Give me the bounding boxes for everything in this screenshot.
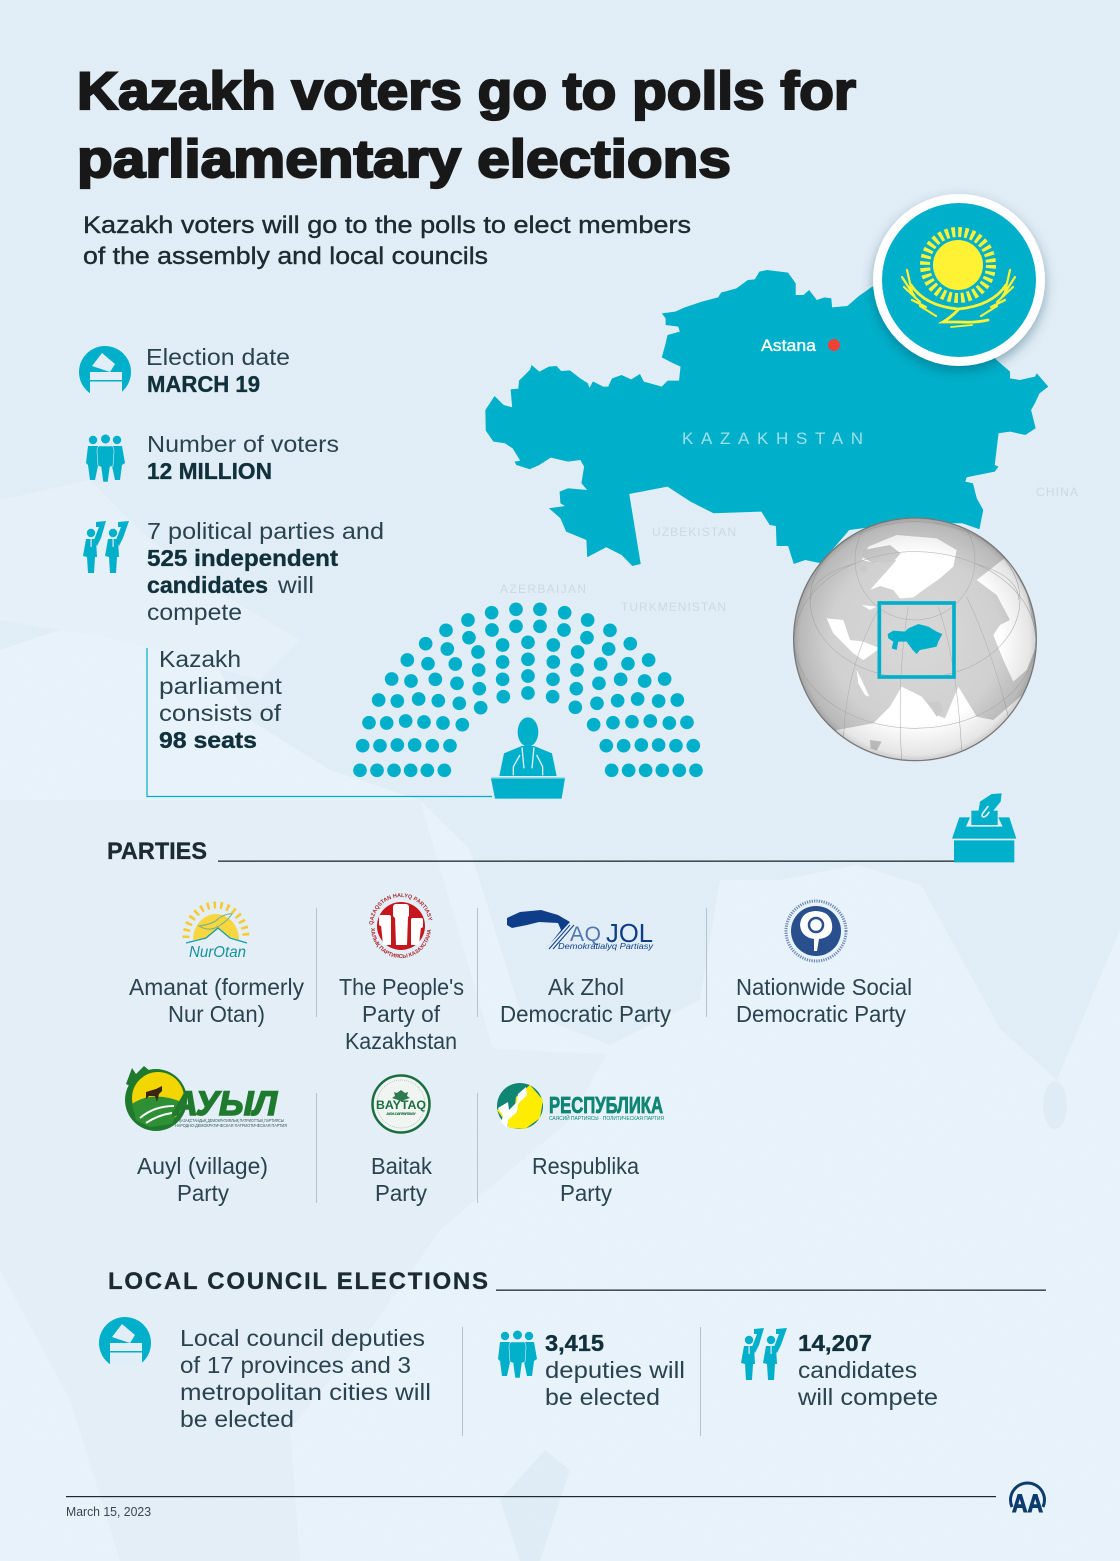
party name: Ak Zhol: Ak Zhol — [548, 974, 624, 1000]
locator square — [879, 603, 954, 677]
icon: candidates — [83, 521, 129, 573]
local council: deputies of provinces: be elected — [180, 1406, 294, 1432]
stat: election date: Election date — [146, 344, 290, 370]
faint neighbouring country labels: AZERBAIJAN — [500, 582, 586, 596]
logo: Baitak: BAYTAQ — [376, 1100, 426, 1112]
local council: deputies to be elected: 3,415 — [545, 1330, 604, 1356]
logo: People's Party: QAZAQSTAN HALYQ PARTIASY — [369, 893, 432, 925]
local council: deputies of provinces: Local council deputies — [180, 1325, 425, 1351]
logo: People's Party: ХАЛЫҚ ПАРТИЯСЫ КАЗАХСТАНА — [371, 928, 432, 958]
local council: deputies to be elected — [498, 1330, 685, 1410]
graticule — [794, 500, 1036, 760]
icon: ballot box — [952, 793, 1016, 862]
logo: Nationwide Social Democratic Party — [786, 901, 846, 961]
local council: deputies to be elected: deputies will — [545, 1357, 685, 1383]
logo: Respublika: РЕСПУБЛИКА — [549, 1092, 663, 1118]
party name: Auyl: Auyl (village) — [137, 1153, 268, 1179]
date footer: March 15, 2023 — [66, 1505, 151, 1519]
logo: Respublika: САЯСИЙ ПАРТИЯСЫ · ПОЛИТИЧЕСКАЯ ПАРТИЯ — [549, 1114, 664, 1122]
local council: candidates — [741, 1328, 938, 1410]
country label: KAZAKHSTAN — [682, 429, 863, 448]
logo: Respublika — [497, 1083, 664, 1129]
eagle — [902, 270, 1015, 327]
local council: candidates: will compete — [797, 1384, 938, 1410]
logo: Aq Jol: Demokratialyq Partiasy — [558, 941, 654, 951]
party name: Baitak: Party — [375, 1180, 427, 1206]
logo: Baitak: JASYLDAR PARTIASY — [386, 1111, 416, 1116]
stat: parties and candidates: will — [277, 572, 314, 598]
parliament seats chart — [353, 602, 703, 799]
faint neighbouring country labels: CHINA — [1036, 485, 1078, 499]
logo: Nur Otan — [186, 905, 247, 961]
logo: Baitak — [372, 1076, 430, 1132]
locator globe — [793, 517, 1037, 762]
parliament callout: 98 seats — [159, 727, 257, 753]
stat: number of voters: 12 MILLION — [147, 458, 272, 484]
logo: Auyl — [125, 1066, 287, 1131]
icon: ballot circle — [79, 346, 131, 398]
subtitle — [83, 212, 691, 270]
icon: voters — [86, 434, 125, 482]
capital label: Astana — [761, 336, 840, 355]
local council: candidates: 14,207 — [798, 1330, 872, 1356]
party name: Nationwide Social Democratic Party — [736, 974, 912, 1027]
subtitle: of the assembly and local councils — [83, 243, 488, 270]
oceans — [826, 535, 1036, 760]
local council: candidates: candidates — [798, 1357, 917, 1383]
party name: People's Party: Kazakhstan — [345, 1028, 457, 1054]
logo: Aq Jol — [507, 910, 654, 951]
stat: number of voters: Number of voters — [147, 431, 339, 457]
parliament callout: parliament — [159, 673, 283, 699]
icon: ballot circle — [99, 1317, 151, 1369]
stat: parties and candidates: compete — [147, 599, 242, 625]
local council: deputies to be elected: be elected — [545, 1384, 660, 1410]
logo: Nur Otan: NurOtan — [189, 944, 246, 961]
title: parliamentary elections — [77, 130, 731, 189]
party name: Nationwide Social Democratic Party: Nationwide Social — [736, 974, 912, 1000]
heading: local council elections: LOCAL COUNCIL ELECTIONS — [108, 1268, 488, 1295]
parliament callout — [147, 646, 492, 796]
logo: Auyl: АУЫЛ — [172, 1085, 278, 1123]
stat: parties and candidates: candidates — [147, 572, 268, 598]
party name: Auyl: Party — [177, 1180, 229, 1206]
icon: candidates — [741, 1328, 787, 1380]
icon: deputies — [498, 1330, 537, 1378]
party name: People's Party: The People's — [339, 974, 464, 1000]
title: Kazakh voters go to polls for — [77, 62, 856, 121]
party name: People's Party: Party of — [362, 1001, 441, 1027]
parliament callout: Kazakh — [159, 646, 241, 672]
party name: Amanat: Amanat (formerly — [129, 974, 304, 1000]
parliament callout: consists of — [159, 700, 282, 726]
flag of Kazakhstan — [873, 194, 1045, 366]
logo: Anadolu Agency: AA — [1012, 1490, 1043, 1518]
party name: Auyl — [137, 1153, 268, 1206]
speaker at podium — [491, 717, 565, 799]
faint neighbouring country labels: UZBEKISTAN — [652, 525, 736, 539]
grey islands — [861, 545, 943, 751]
party name: Ak Zhol — [500, 974, 671, 1027]
party name: Baitak: Baitak — [371, 1153, 432, 1179]
local council: deputies of provinces: metropolitan cities will — [180, 1379, 431, 1405]
party name: Amanat — [129, 974, 304, 1027]
stat: parties and candidates — [83, 518, 384, 625]
heading: parties: PARTIES — [107, 838, 207, 865]
local council: deputies of provinces: of 17 provinces and 3 — [180, 1352, 411, 1378]
subtitle: Kazakh voters will go to the polls to elect members — [83, 212, 691, 239]
party name: Ak Zhol: Democratic Party — [500, 1001, 671, 1027]
title — [77, 62, 856, 189]
party name: Respublika: Respublika — [532, 1153, 639, 1179]
logo: Auyl: ҚАЗАҚСТАНДЫҚ ДЕМОКРАТИЯЛЫҚ ПАТРИОТТЫҚ ПАРТИЯСЫ — [179, 1118, 284, 1123]
capital label: Astana: Astana — [761, 336, 817, 355]
local council: deputies of provinces — [99, 1317, 431, 1432]
party name: Respublika — [532, 1153, 639, 1206]
party name: People's Party — [339, 974, 464, 1054]
party name: Baitak — [371, 1153, 432, 1206]
party name: Nationwide Social Democratic Party: Democratic Party — [736, 1001, 906, 1027]
logo: Aq Jol: AQ — [570, 923, 601, 946]
faint neighbouring country labels — [500, 485, 1078, 614]
party name: Amanat: Nur Otan) — [168, 1001, 265, 1027]
party name: Respublika: Party — [560, 1180, 612, 1206]
faint neighbouring country labels: TURKMENISTAN — [621, 600, 726, 614]
logo: Aq Jol: JOL — [606, 918, 653, 948]
stat: number of voters — [86, 431, 339, 484]
sun rays — [925, 232, 991, 298]
stat: parties and candidates: 525 independent — [147, 545, 338, 571]
stat: election date: MARCH 19 — [147, 371, 260, 397]
logo: Auyl: НАРОДНО-ДЕМОКРАТИЧЕСКАЯ ПАТРИОТИЧЕСКАЯ ПАРТИЯ — [175, 1123, 287, 1128]
mini Kazakhstan — [888, 624, 942, 654]
stat: election date — [79, 344, 290, 398]
map: Kazakhstan — [485, 270, 1048, 566]
stat: parties and candidates: 7 political parties and — [147, 518, 384, 544]
logo: People's Party — [369, 893, 432, 958]
